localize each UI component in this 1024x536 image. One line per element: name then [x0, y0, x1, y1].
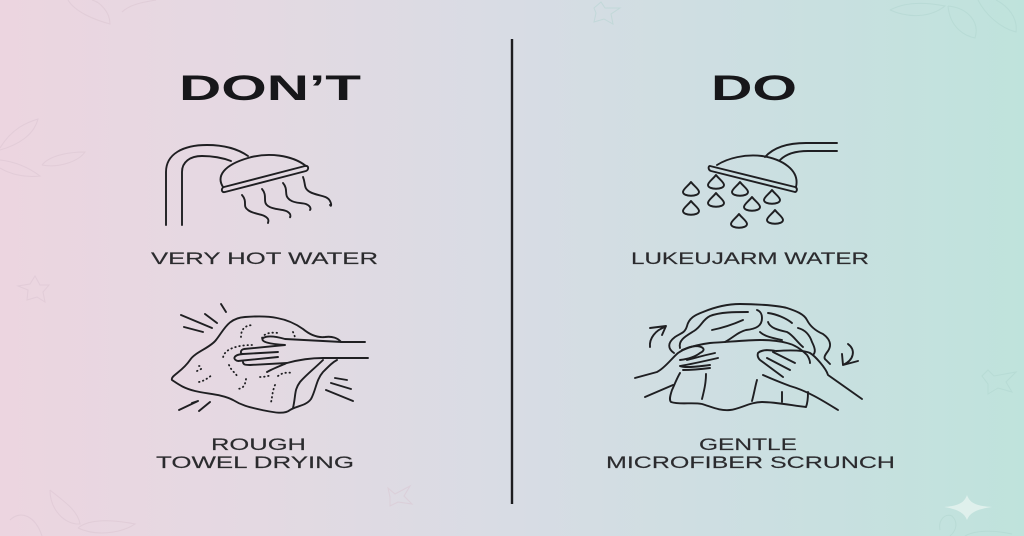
icon: hot shower [166, 145, 331, 225]
towel outline [172, 316, 341, 413]
icon: gentle microfiber scrunch [635, 304, 862, 410]
impact lines [179, 304, 353, 411]
label: microfiber scrunch: MICROFIBER SCRUNCH [606, 454, 895, 472]
center divider [511, 39, 513, 504]
icon: rough towel drying [172, 304, 368, 413]
hair [669, 304, 830, 364]
motion arrows [650, 326, 666, 347]
sparkle mark [944, 495, 992, 520]
heading: DON'T: DON’T [179, 69, 361, 108]
icon: lukewarm shower [683, 143, 837, 228]
label: lukewarm water: LUKEUJARM WATER [631, 250, 869, 268]
label: gentle: GENTLE [699, 436, 797, 454]
label: rough: ROUGH [211, 436, 306, 454]
heading: DO: DO [711, 69, 797, 108]
towel [682, 340, 810, 363]
left hand and arm [635, 346, 718, 397]
label: very hot water: VERY HOT WATER [151, 250, 378, 268]
right hand and arm [758, 350, 862, 410]
label: towel drying: TOWEL DRYING [156, 454, 354, 472]
hand [234, 336, 368, 372]
towel texture dots [197, 325, 295, 402]
